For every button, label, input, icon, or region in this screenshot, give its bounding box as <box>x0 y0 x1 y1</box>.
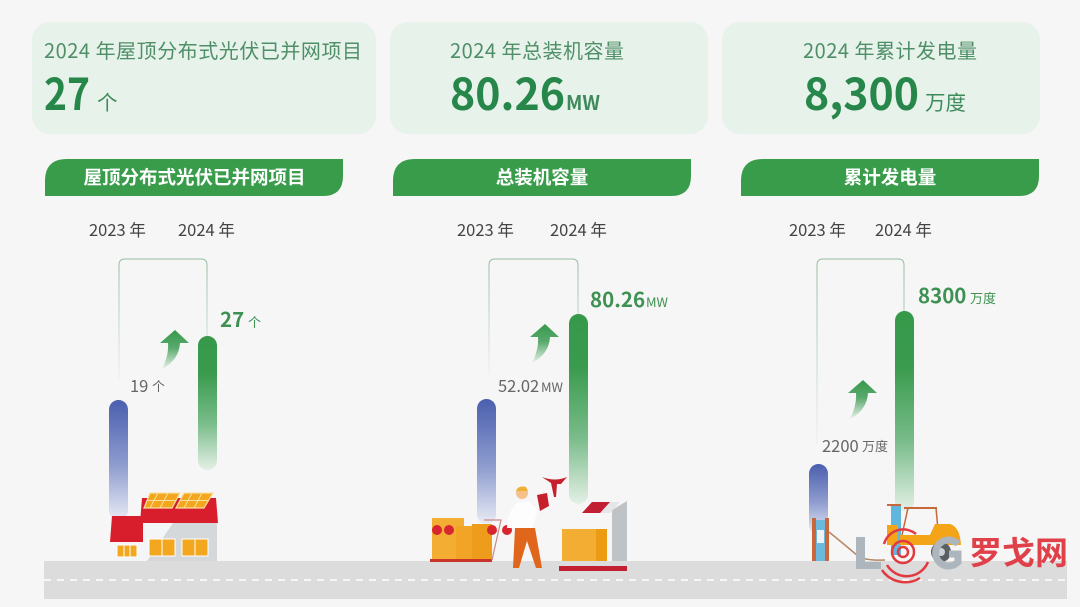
heading: rooftop PV <box>45 159 343 196</box>
panel: total capacity summary card: 2024 年总装机容量 <box>450 35 624 64</box>
chart: rooftop PV comparison: 2024 年 <box>178 217 235 241</box>
panel: total capacity summary card <box>390 22 708 134</box>
heading: cumulative generation <box>741 159 1039 196</box>
logo: watermark <box>856 528 1068 582</box>
chart: cumulative generation comparison: 2200 <box>822 433 859 457</box>
panel: cumulative generation summary card <box>722 22 1040 134</box>
heading: total capacity <box>393 159 691 196</box>
heading: cumulative generation: 累计发电量 <box>844 164 936 190</box>
chart: total capacity comparison: 80.26 <box>590 283 645 313</box>
chart: cumulative generation comparison: 2024 年 <box>875 217 932 241</box>
chart: cumulative generation comparison <box>789 217 996 534</box>
panel: rooftop PV summary card <box>32 22 376 134</box>
icon: charging post and forklift <box>812 505 961 562</box>
panel: total capacity summary card: MW <box>566 86 600 116</box>
chart: rooftop PV comparison: 19 <box>130 373 148 397</box>
chart: total capacity comparison: 2024 年 <box>550 217 607 241</box>
panel: total capacity summary card: 80.26 <box>450 59 565 123</box>
panel: rooftop PV summary card: 个 <box>97 86 118 116</box>
panel: cumulative generation summary card: 2024 年累计发电量 <box>803 35 977 64</box>
icon: worker with cargo and scale <box>430 477 627 571</box>
road <box>44 561 1067 599</box>
chart: rooftop PV comparison: 个 <box>152 376 165 395</box>
chart: rooftop PV comparison: 个 <box>248 312 261 331</box>
chart: total capacity comparison <box>457 217 669 524</box>
chart: cumulative generation comparison: 万度 <box>862 436 888 455</box>
panel: cumulative generation summary card: 万度 <box>925 86 966 116</box>
heading: rooftop PV: 屋顶分布式光伏已并网项目 <box>83 164 306 190</box>
logo: watermark: 罗戈网 <box>969 528 1068 574</box>
chart: rooftop PV comparison: 27 <box>220 303 244 333</box>
chart: total capacity comparison: MW <box>541 377 564 396</box>
chart: rooftop PV comparison <box>89 217 261 520</box>
chart: cumulative generation comparison: 8300 <box>918 279 966 309</box>
icon: house with solar panels <box>110 493 218 561</box>
chart: total capacity comparison: 52.02 <box>498 373 539 397</box>
chart: total capacity comparison: 2023 年 <box>457 217 514 241</box>
panel: rooftop PV summary card: 27 <box>44 59 90 123</box>
panel: rooftop PV summary card: 2024 年屋顶分布式光伏已并网项目 <box>44 35 362 64</box>
chart: cumulative generation comparison: 万度 <box>970 288 996 307</box>
chart: rooftop PV comparison: 2023 年 <box>89 217 146 241</box>
panel: cumulative generation summary card: 8,300 <box>804 59 919 123</box>
heading: total capacity: 总装机容量 <box>496 164 588 190</box>
chart: total capacity comparison: MW <box>646 292 669 311</box>
chart: cumulative generation comparison: 2023 年 <box>789 217 846 241</box>
